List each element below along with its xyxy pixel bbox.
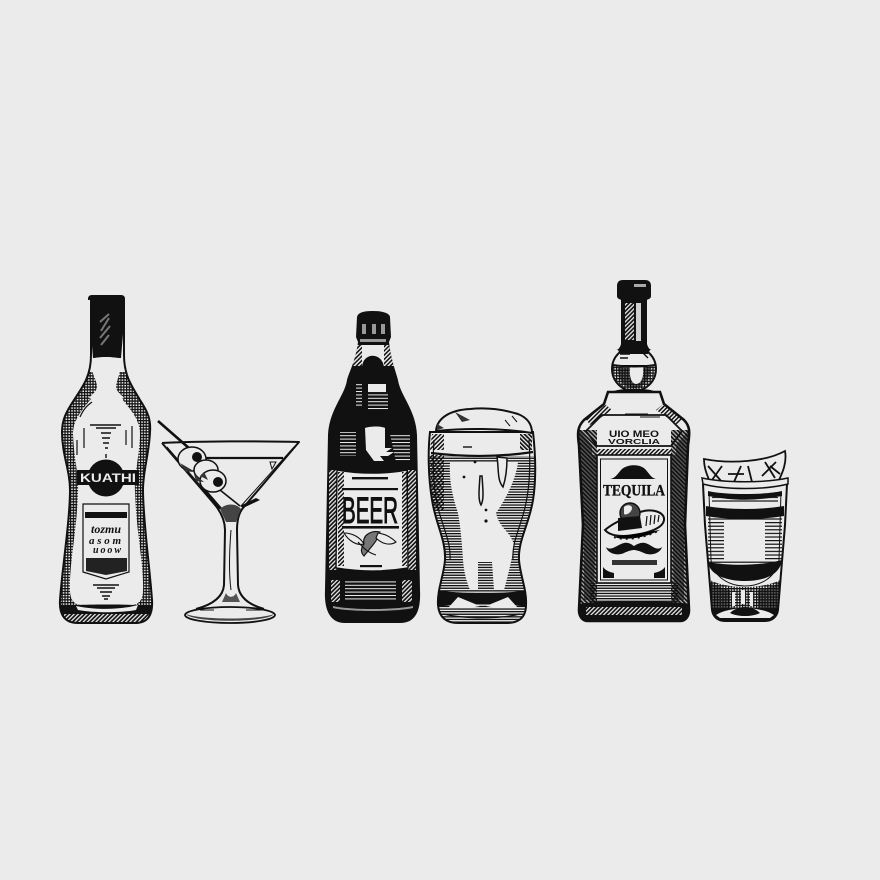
medallion and band label bbox=[77, 460, 139, 496]
beer label: BEER bbox=[342, 490, 398, 531]
foam drips bbox=[497, 457, 507, 487]
tequila bottle bbox=[576, 280, 692, 625]
illustration: six drinks on a grey background bbox=[58, 280, 789, 624]
cocktail pick bbox=[158, 421, 190, 449]
vermouth bottle bbox=[58, 295, 154, 624]
tequila label: TEQUILA bbox=[603, 482, 666, 500]
beer bottle bbox=[325, 311, 420, 623]
bulb of neck bbox=[612, 347, 656, 391]
bottle cap and neck bbox=[616, 280, 652, 350]
bottle body bbox=[578, 392, 689, 621]
beer label bbox=[336, 470, 408, 571]
paper label: tozmu bbox=[91, 522, 121, 536]
icon: sombrero bbox=[605, 503, 664, 539]
foam head bbox=[436, 408, 532, 433]
icon: leaf ornament bbox=[344, 532, 396, 556]
martini glass bbox=[158, 421, 299, 623]
olives bbox=[178, 447, 226, 492]
icon: neck foil bbox=[90, 297, 124, 358]
beer pint glass bbox=[425, 408, 540, 630]
paper label: asom bbox=[89, 535, 121, 547]
neck-shadow ticks above the collar bbox=[90, 425, 121, 465]
shot glass with lime wedge bbox=[702, 451, 788, 622]
base bbox=[185, 607, 275, 623]
liquid line bbox=[178, 457, 283, 459]
icon: dark dome bbox=[610, 465, 656, 479]
shoulder text: VORCLIA bbox=[608, 439, 660, 446]
tequila label bbox=[597, 455, 671, 583]
icon: lime wedge bbox=[704, 451, 786, 482]
paper label bbox=[83, 504, 129, 579]
shoulder text bbox=[608, 429, 660, 446]
icon: mustache bbox=[606, 543, 662, 554]
medallion and band label: KUATHI bbox=[80, 471, 136, 485]
shoulder text: UIO MEO bbox=[609, 429, 659, 439]
paper label: uoow bbox=[93, 545, 121, 556]
